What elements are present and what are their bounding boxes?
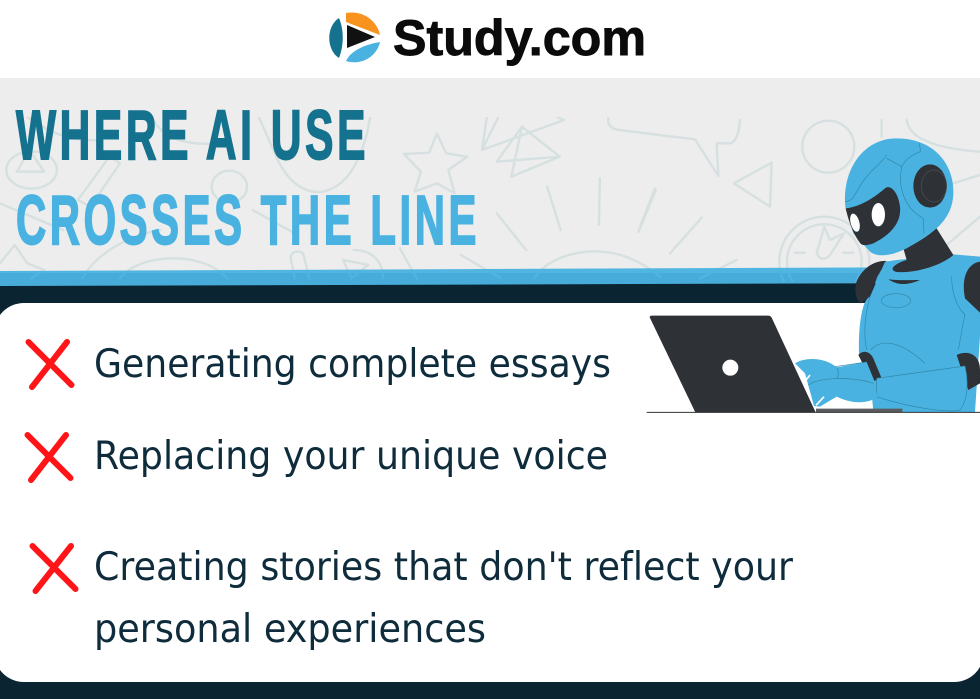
icon: red X [28, 342, 72, 387]
panel: list of AI misuses [0, 303, 980, 682]
illustration: robot using laptop [647, 138, 980, 412]
list item 3 [32, 545, 794, 652]
title [16, 96, 480, 259]
text: creating stories: Creating stories that don't reflect your [94, 545, 794, 590]
icon: play logo mark [329, 12, 380, 62]
laptop [650, 316, 902, 412]
robot neck [893, 227, 953, 272]
decorative doodle background [0, 117, 980, 282]
list item 2 [28, 434, 608, 480]
robot head [845, 138, 953, 255]
text: replacing voice: Replacing your unique voice [94, 434, 608, 479]
blue band [0, 267, 980, 286]
icon: red X [28, 435, 70, 480]
title line 1: WHERE AI USE [16, 96, 369, 174]
icon: red X [32, 546, 76, 591]
title line 2: CROSSES THE LINE [16, 181, 480, 259]
list item 1 [28, 342, 611, 387]
text: personal experiences: personal experiences [94, 607, 486, 652]
logo wordmark: Study.com [393, 10, 646, 66]
robot body [855, 254, 980, 412]
text: generating essays: Generating complete essays [94, 342, 611, 387]
robot hands [795, 359, 877, 407]
ground line [647, 411, 980, 414]
logo: Study.com [329, 10, 646, 66]
